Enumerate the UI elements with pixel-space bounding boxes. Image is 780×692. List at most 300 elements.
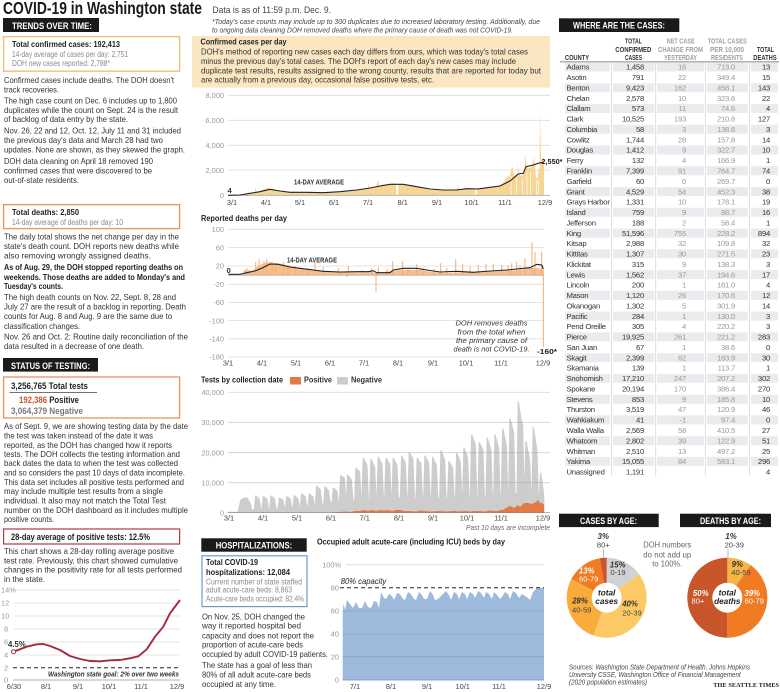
table: county rows: 305 xyxy=(632,322,644,331)
table: county rows: Lincoln xyxy=(566,281,589,290)
bar chart: confirmed cases per day: 3/1 xyxy=(227,198,237,207)
bar chart: reported deaths per day: 8/1 xyxy=(393,359,403,368)
text block: testing notes: As of Sept. 9, we are showing testing data by the date xyxy=(4,421,188,431)
table: county rows: 458.1 xyxy=(717,84,735,92)
table: county rows: 41 xyxy=(636,416,644,425)
text block: hospital notes: 80% of all adult acute-care beds xyxy=(202,670,311,680)
callout: test totals xyxy=(4,377,180,418)
table: county rows: 452.3 xyxy=(717,187,735,196)
callout: test totals: 3,256,765 Total tests xyxy=(11,381,88,391)
table header: CONFIRMED xyxy=(615,45,651,54)
heading: tests by collection date: Tests by collection date xyxy=(201,375,283,385)
table: county rows: 0 xyxy=(766,416,770,425)
table: county rows: 2,578 xyxy=(626,94,644,103)
text block: method note: DOH's method of reporting new cases each day differs from ours, which was today's total cases xyxy=(201,46,528,56)
table: county rows: 10 xyxy=(762,146,770,155)
text block: positivity note xyxy=(4,546,182,584)
table: county rows: 13 xyxy=(678,447,686,456)
text block: deaths notes xyxy=(3,231,188,351)
table: county rows: 130.0 xyxy=(717,312,735,321)
table: county rows: 0 xyxy=(766,343,770,352)
table: county rows: Skamania xyxy=(566,364,600,373)
table: county rows: 157.8 xyxy=(717,135,735,144)
donut chart: deaths by age: total xyxy=(719,589,737,598)
table: county rows: 7,399 xyxy=(626,166,644,176)
table: county rows: Kitsap xyxy=(566,239,586,248)
bar chart: confirmed cases per day: 4,000 xyxy=(206,141,224,150)
table: county rows: 349.4 xyxy=(717,73,736,82)
table: county rows: 13 xyxy=(762,63,770,72)
sources: Sources: Washington State Department of Health, Johns Hopkins xyxy=(569,662,750,671)
bar chart: reported deaths per day: -140 xyxy=(209,334,224,344)
table: county rows: 23 xyxy=(762,250,770,258)
callout: test totals: 192,386 Positive xyxy=(19,395,79,405)
donut chart: deaths by age: 39% xyxy=(744,589,760,598)
table: county rows: 9 xyxy=(682,395,686,404)
text block: testing notes xyxy=(4,421,188,524)
table: county rows: 54 xyxy=(678,187,687,196)
callout: total confirmed cases: 14-day average of cases per day: 2,751 xyxy=(12,50,128,59)
table: county rows: 3 xyxy=(766,312,770,321)
donut chart: cases by age: 15% xyxy=(610,560,626,569)
table: county rows: 755 xyxy=(674,229,686,238)
table: county rows: 269.7 xyxy=(717,177,735,186)
bar chart: reported deaths per day: 14-DAY AVERAGE xyxy=(287,256,337,264)
heading: deaths by age: DEATHS BY AGE: xyxy=(700,516,761,527)
line chart: positivity rate xyxy=(1,586,184,691)
text block: positivity note: This chart shows a 28-day rolling average positive xyxy=(4,546,174,556)
text block: cases notes: of backlog of data entry by the state. xyxy=(4,114,128,124)
line chart: positivity rate: 8 xyxy=(4,624,8,634)
table: county rows: 138.6 xyxy=(717,125,735,134)
table header: PER 10,000 xyxy=(710,45,744,54)
table: county rows: 1,302 xyxy=(626,301,644,310)
area chart: occupied beds: 80% capacity xyxy=(341,577,387,586)
text block: cases notes: track recoveries. xyxy=(4,84,59,94)
panel: where are the cases xyxy=(559,18,779,478)
line chart: positivity rate: 9/1 xyxy=(73,682,83,691)
line chart: positivity rate: 12 xyxy=(1,598,9,608)
table: county rows: 1,744 xyxy=(626,135,645,144)
text block: deaths notes: classification changes. xyxy=(4,321,80,331)
area chart: tests by collection date: 5/1 xyxy=(292,514,302,523)
bar chart: confirmed cases per day: 6/1 xyxy=(329,198,339,207)
heading: where are the cases: WHERE ARE THE CASES: xyxy=(573,21,665,32)
legend: Negative xyxy=(351,375,382,385)
table: county rows: Douglas xyxy=(566,146,593,155)
table: county rows: 15 xyxy=(762,73,770,82)
table: county rows: Thurston xyxy=(566,405,595,414)
table: county rows: 2,510 xyxy=(626,447,644,456)
area chart: occupied beds: 8/1 xyxy=(386,682,396,691)
table: county rows: 113.7 xyxy=(718,364,735,373)
table: county rows: 25 xyxy=(762,447,770,456)
callout: total hospitalizations: hospitalizations: 12,084 xyxy=(206,567,290,577)
area chart: tests by collection date: 11/1 xyxy=(494,514,508,523)
text block: cases notes: Nov. 26, 22 and 12, Oct. 12, July 11 and 31 included xyxy=(4,126,181,136)
table: county rows: Pierce xyxy=(566,333,587,342)
table: county rows: 3 xyxy=(766,322,770,331)
callout: total deaths: 14-day average of deaths per day: 10 xyxy=(12,218,124,227)
text block: testing notes: and so considers the past 10 days of data incomplete. xyxy=(4,468,185,478)
panel: trends over time xyxy=(3,18,188,351)
table: county rows: 4 xyxy=(682,322,687,331)
donut chart: deaths by age: 1% xyxy=(725,532,737,541)
line chart: positivity rate: 6 xyxy=(4,638,8,646)
callout: DOH removes deaths: the primary cause of xyxy=(456,336,528,345)
text block: hospital notes: occupied by adult COVID-19 patients. xyxy=(202,649,328,659)
bar chart: confirmed cases per day: 9/1 xyxy=(432,198,442,207)
text block: positivity note: test rate. Previously, this chart showed cumulative xyxy=(4,555,178,565)
table header: TOTAL CASES xyxy=(708,36,747,45)
bar chart: confirmed cases per day: 10/1 xyxy=(464,198,479,207)
table: county rows: Kittitas xyxy=(566,250,588,258)
table: county rows: 74.6 xyxy=(721,104,735,113)
text block: hospital notes: The state has a goal of less than xyxy=(202,660,312,670)
bar chart: reported deaths per day: -100 xyxy=(209,316,224,325)
table: county rows: 322.7 xyxy=(717,146,735,155)
heading: status of testing: STATUS OF TESTING: xyxy=(11,361,90,372)
table: county rows: 1,331 xyxy=(626,198,644,207)
table: county rows: 221.2 xyxy=(717,333,735,342)
table: county rows: Mason xyxy=(566,291,588,300)
table: county rows: 17 xyxy=(762,270,770,279)
text block: deaths notes: counts for Aug. 8 and Aug. 9 are the same due to xyxy=(4,311,172,321)
donut chart: deaths by age: 20-39 xyxy=(725,540,744,549)
donut chart: deaths by age: 40-59 xyxy=(731,568,751,577)
heading: reported deaths per day: Reported deaths per day xyxy=(201,213,287,223)
text block: hospital notes xyxy=(201,611,328,689)
table: county rows: Yakima xyxy=(566,457,591,466)
table: county rows: 28 xyxy=(678,135,686,144)
line chart: positivity rate: 10 xyxy=(1,612,9,620)
donut chart: deaths by age: 80+ xyxy=(692,597,705,606)
line chart: positivity rate: 14% xyxy=(1,586,16,594)
callout: total confirmed cases: DOH new cases reported: 2,788* xyxy=(12,59,110,68)
table: county rows: 74 xyxy=(762,166,771,176)
table: county rows: 4,529 xyxy=(626,187,644,196)
table: county rows: 51 xyxy=(762,436,770,445)
table: county rows: 3 xyxy=(766,260,770,269)
table: county rows: Wahkiakum xyxy=(566,416,604,425)
table: county rows: 4 xyxy=(766,104,771,113)
bar chart: confirmed cases per day: 11/1 xyxy=(498,198,512,207)
note: past 10 days are incomplete: Past 10 days are incomplete xyxy=(466,523,550,532)
table: county rows: San Juan xyxy=(566,343,597,352)
text block: deaths notes: weekends. Those deaths are added to Monday's and xyxy=(3,272,185,282)
heading: hospitalizations xyxy=(201,538,307,552)
table: county rows: 51,596 xyxy=(622,229,644,238)
table header: CASES xyxy=(625,53,642,62)
text block: cases notes: the previous day's data and March 28 had two xyxy=(4,135,163,145)
table: county rows: 14 xyxy=(762,301,771,310)
table: county rows: 188 xyxy=(632,218,644,227)
bar chart: confirmed cases per day: 2,550* xyxy=(542,157,563,166)
table: county rows: 10 xyxy=(678,94,686,103)
table: county rows: 853 xyxy=(632,395,644,404)
table: county rows: 228.2 xyxy=(717,229,735,238)
text block: hospital notes: proportion of acute-care beds xyxy=(202,640,303,650)
table: county rows: 9 xyxy=(682,146,686,155)
table: county rows: 323.6 xyxy=(717,94,735,103)
table: county rows: 181.0 xyxy=(717,281,735,290)
text block: cases notes xyxy=(4,75,185,185)
heading: confirmed cases per day: Confirmed cases per day xyxy=(200,36,287,46)
text block: cases notes: out-of-state residents. xyxy=(4,175,79,185)
table: county rows: 170 xyxy=(674,384,686,394)
area chart: occupied beds: 20 xyxy=(331,652,339,661)
table: county rows: 9,423 xyxy=(626,84,644,92)
table: county rows: 178.1 xyxy=(717,198,735,207)
table: county rows: 1 xyxy=(682,364,686,373)
text block: cases notes: The high case count on Dec. 6 includes up to 1,800 xyxy=(4,96,177,106)
table: county rows: 15,055 xyxy=(622,457,644,466)
table: county rows: 302 xyxy=(758,374,770,383)
heading: status of testing xyxy=(3,358,98,372)
table: county rows: 127 xyxy=(758,115,770,124)
table: county rows: 47 xyxy=(678,405,686,414)
callout: total hospitalizations: Current number of state staffed xyxy=(206,577,302,586)
table: county rows: Cowlitz xyxy=(566,135,590,144)
table header xyxy=(565,36,777,62)
table: county rows: Adams xyxy=(566,63,590,72)
text block: testing notes: reported, as the DOH has changed how it reports xyxy=(4,440,172,450)
table: county rows: 143 xyxy=(758,84,770,92)
table: county rows: Ferry xyxy=(566,156,584,165)
bar chart: confirmed cases per day: 6,000 xyxy=(206,116,224,125)
table header: NET CASE xyxy=(667,36,695,45)
text block: deaths notes: data resulted in a decrease of one death. xyxy=(4,341,144,351)
donut chart: cases by age: 3% xyxy=(598,532,609,541)
donut chart: deaths by age: 9% xyxy=(732,560,743,569)
table: county rows: 30 xyxy=(762,353,770,362)
heading: cases by age: CASES BY AGE: xyxy=(580,516,637,527)
callout: 28-day average of positive tests xyxy=(4,529,180,544)
text block: method note xyxy=(201,46,542,84)
table: county rows: 764.7 xyxy=(717,166,735,176)
table: county rows: 573 xyxy=(632,104,644,113)
table: county rows: 97.4 xyxy=(721,416,736,425)
sources: University CSSE, Washington Office of Financial Management xyxy=(569,670,741,679)
table: county rows: 139 xyxy=(632,364,644,373)
table: county rows: 58.4 xyxy=(721,218,736,227)
table: county rows: 67 xyxy=(636,343,644,352)
table: county rows: -1 xyxy=(680,416,686,425)
table: county rows: 58 xyxy=(678,426,686,435)
table: county rows: 19 xyxy=(762,198,770,207)
table: county rows: Grant xyxy=(566,187,586,196)
table: county rows: 296 xyxy=(758,457,770,466)
bar chart: reported deaths per day: 11/1 xyxy=(494,359,508,368)
table: county rows: 1 xyxy=(766,364,770,373)
table: county rows: 3,519 xyxy=(626,405,644,414)
bar chart: confirmed cases per day: 4/1 xyxy=(261,198,271,207)
table: county rows: 37 xyxy=(678,270,686,279)
area chart: tests by collection date: 9/1 xyxy=(428,514,438,523)
table header: COUNTY xyxy=(565,53,589,62)
table: county rows: Franklin xyxy=(566,166,592,176)
table: county rows: 11 xyxy=(679,104,686,113)
donut chart: deaths by age: 60-79 xyxy=(745,597,764,606)
bar chart: confirmed cases per day: 8/1 xyxy=(398,198,408,207)
heading: where are the cases xyxy=(559,18,679,32)
text block: cases notes: confirmed cases that were discovered to be xyxy=(4,166,152,176)
bar chart: confirmed cases per day: 12/9 xyxy=(538,198,552,207)
area chart: occupied beds: 100% xyxy=(322,560,341,569)
sources: (2020 population estimates) xyxy=(569,678,647,687)
table: county rows: 132 xyxy=(632,156,644,165)
area chart: occupied beds: 40 xyxy=(331,630,339,639)
table: county rows: 16 xyxy=(762,208,770,217)
table: county rows: 1 xyxy=(682,312,686,321)
text block: cases notes: Confirmed cases include deaths. The DOH doesn't xyxy=(4,75,175,85)
bar chart: reported deaths per day: 6/1 xyxy=(325,359,335,368)
table: county rows: Unassigned xyxy=(566,468,605,476)
table: county rows: 38.6 xyxy=(721,343,735,352)
table: county rows: Columbia xyxy=(566,125,598,134)
table: county rows: 38 xyxy=(762,187,770,196)
bar chart: reported deaths per day: -20 xyxy=(213,280,224,289)
table: county rows: 183.9 xyxy=(717,353,735,362)
table: county rows: 10 xyxy=(762,395,770,404)
bar chart: confirmed cases per day: 8,000 xyxy=(206,91,224,100)
text block: cases notes: DOH data cleaning on April 18 removed 190 xyxy=(4,156,153,166)
table: county rows: 284 xyxy=(632,312,645,321)
table: county rows: 166.9 xyxy=(717,156,735,165)
area chart: tests by collection date: 4/1 xyxy=(258,514,268,523)
table: county rows: 315 xyxy=(632,260,644,269)
donut chart: cases by age: 0-19 xyxy=(610,568,626,577)
table: county rows: Lewis xyxy=(566,270,585,279)
area chart: occupied beds: 0 xyxy=(335,676,339,685)
table: county rows: 2,569 xyxy=(626,426,644,435)
bar chart: confirmed cases per day: 0 xyxy=(220,191,224,200)
text block: testing notes: back dates the data to when the test was collected xyxy=(4,458,178,468)
area chart: occupied beds: 7/1 xyxy=(350,682,360,691)
area chart: occupied beds xyxy=(317,537,551,691)
text block: deaths notes: Tuesday's counts. xyxy=(4,281,63,291)
text block: cases notes: updates. None are shown, as they skewed the graph. xyxy=(4,144,185,154)
bar chart: reported deaths per day: 9/1 xyxy=(428,359,438,368)
table: county rows: Stevens xyxy=(566,395,593,404)
table: county rows: 207.2 xyxy=(717,374,735,383)
table: county rows: 1 xyxy=(682,343,686,352)
table: county rows: 301.9 xyxy=(717,301,735,310)
table: county rows: 220.2 xyxy=(717,322,735,331)
donut chart: cases by age xyxy=(567,532,647,638)
callout: DOH removes deaths xyxy=(454,319,530,354)
bar chart: reported deaths per day: -160* xyxy=(537,347,557,356)
table: county rows: 270 xyxy=(758,384,770,394)
table: county rows: 1,120 xyxy=(626,291,644,300)
heading: trends over time xyxy=(3,18,99,32)
table: county rows: 3 xyxy=(766,125,770,134)
area chart: occupied beds: 12/9 xyxy=(537,682,551,691)
table: county rows: 1 xyxy=(682,281,686,290)
bar chart: reported deaths per day: -60 xyxy=(213,298,224,307)
heading: hospitalizations: HOSPITALIZATIONS: xyxy=(216,540,292,552)
bar chart: confirmed cases per day: 2,000 xyxy=(206,166,224,175)
text block: testing notes: number on the DOH dashboard as it includes multiple xyxy=(4,505,188,515)
text block: method note: are actually from a previous day, occasional false positive tests, etc. xyxy=(201,74,434,84)
donut chart: cases by age: total xyxy=(598,589,616,598)
text block: method note: minus the previous day's total cases. The DOH's report of each day's new cases may include xyxy=(201,56,516,66)
area chart: tests by collection date: 6/1 xyxy=(326,514,336,523)
bar chart: reported deaths per day: 100 xyxy=(212,225,224,234)
note: DOH numbers do not add up: to 100%. xyxy=(652,559,682,569)
area chart: tests by collection date: 3/1 xyxy=(224,514,234,523)
area chart: tests by collection date: 8/1 xyxy=(394,514,404,523)
heading: trends over time: TRENDS OVER TIME: xyxy=(12,21,92,32)
area chart: occupied beds: 9/1 xyxy=(422,682,432,691)
bar chart: reported deaths per day: 10/1 xyxy=(459,359,473,368)
table: county rows: Island xyxy=(566,208,586,217)
donut chart: cases by age: 80+ xyxy=(597,540,610,549)
donut chart: cases by age: cases xyxy=(595,597,619,606)
table: county rows: 26 xyxy=(678,291,686,300)
panel: hospitalizations xyxy=(201,538,328,689)
footnote: *Today's case counts may include up to 300 duplicates due to increased laboratory testing. Additionally, due xyxy=(212,17,540,26)
table: county rows: 210.8 xyxy=(717,115,735,124)
callout: total deaths: Total deaths: 2,850 xyxy=(12,207,79,217)
table header: CHANGE FROM xyxy=(658,45,703,54)
table: county rows: 58 xyxy=(636,125,644,134)
panel: confirmed cases explainer xyxy=(192,36,550,88)
note: DOH numbers do not add up: DOH numbers xyxy=(643,540,691,550)
table: county rows: 46 xyxy=(762,405,770,414)
text block: hospital notes: On Nov. 25, DOH changed the xyxy=(202,611,305,621)
table: county rows: 4 xyxy=(766,468,771,476)
line chart: positivity rate: 11/1 xyxy=(134,682,148,691)
text block: method note: duplicate test results, results assigned to the wrong county, results that are reported for today but xyxy=(201,65,542,75)
table: county rows: 194.6 xyxy=(717,270,735,279)
callout: total hospitalizations xyxy=(202,556,307,607)
table: county rows: 16 xyxy=(678,63,686,72)
line chart: positivity rate: 12/9 xyxy=(170,682,184,691)
table: county rows: 193 xyxy=(674,115,686,124)
table: county rows: 410.5 xyxy=(717,426,735,435)
table: county rows: 62 xyxy=(678,353,686,362)
area chart: tests by collection date: 40,000 xyxy=(201,388,224,397)
table: county rows: 30 xyxy=(678,250,686,258)
table: county rows: 162 xyxy=(674,84,686,92)
table: county rows: 3 xyxy=(682,125,686,134)
table: county rows: 1,191 xyxy=(626,468,644,476)
bar chart: reported deaths per day: 7/1 xyxy=(359,359,369,368)
table: county rows: 894 xyxy=(758,229,771,238)
table: county rows: 84 xyxy=(678,457,687,466)
donut chart: cases by age: 28% xyxy=(571,596,588,605)
table: county rows: 200 xyxy=(632,281,644,290)
text block: testing notes: may include multiple test results from a single xyxy=(4,486,163,496)
text block: deaths notes: state's death count. DOH reports new deaths while xyxy=(4,241,179,251)
table: county rows: 20,194 xyxy=(622,384,645,394)
line chart: positivity rate: 6/30 xyxy=(7,682,21,691)
table: county rows: Garfield xyxy=(566,177,591,186)
table: county rows: 39 xyxy=(678,436,686,445)
table: county rows: Clallam xyxy=(566,104,590,113)
panel: deaths by age xyxy=(680,514,771,638)
line chart: positivity rate: 8/1 xyxy=(41,682,51,691)
table: county rows: 759 xyxy=(632,208,644,217)
text block: hospital notes: occupied at any time. xyxy=(202,679,276,689)
bar chart: confirmed cases per day: 7/1 xyxy=(363,198,373,207)
table: county rows: 32 xyxy=(678,239,686,248)
bar chart: confirmed cases per day xyxy=(206,91,563,207)
table: county rows: 497.2 xyxy=(717,447,735,456)
area chart: tests by collection date: 10/1 xyxy=(460,514,474,523)
bar chart: reported deaths per day: 60 xyxy=(216,243,224,252)
